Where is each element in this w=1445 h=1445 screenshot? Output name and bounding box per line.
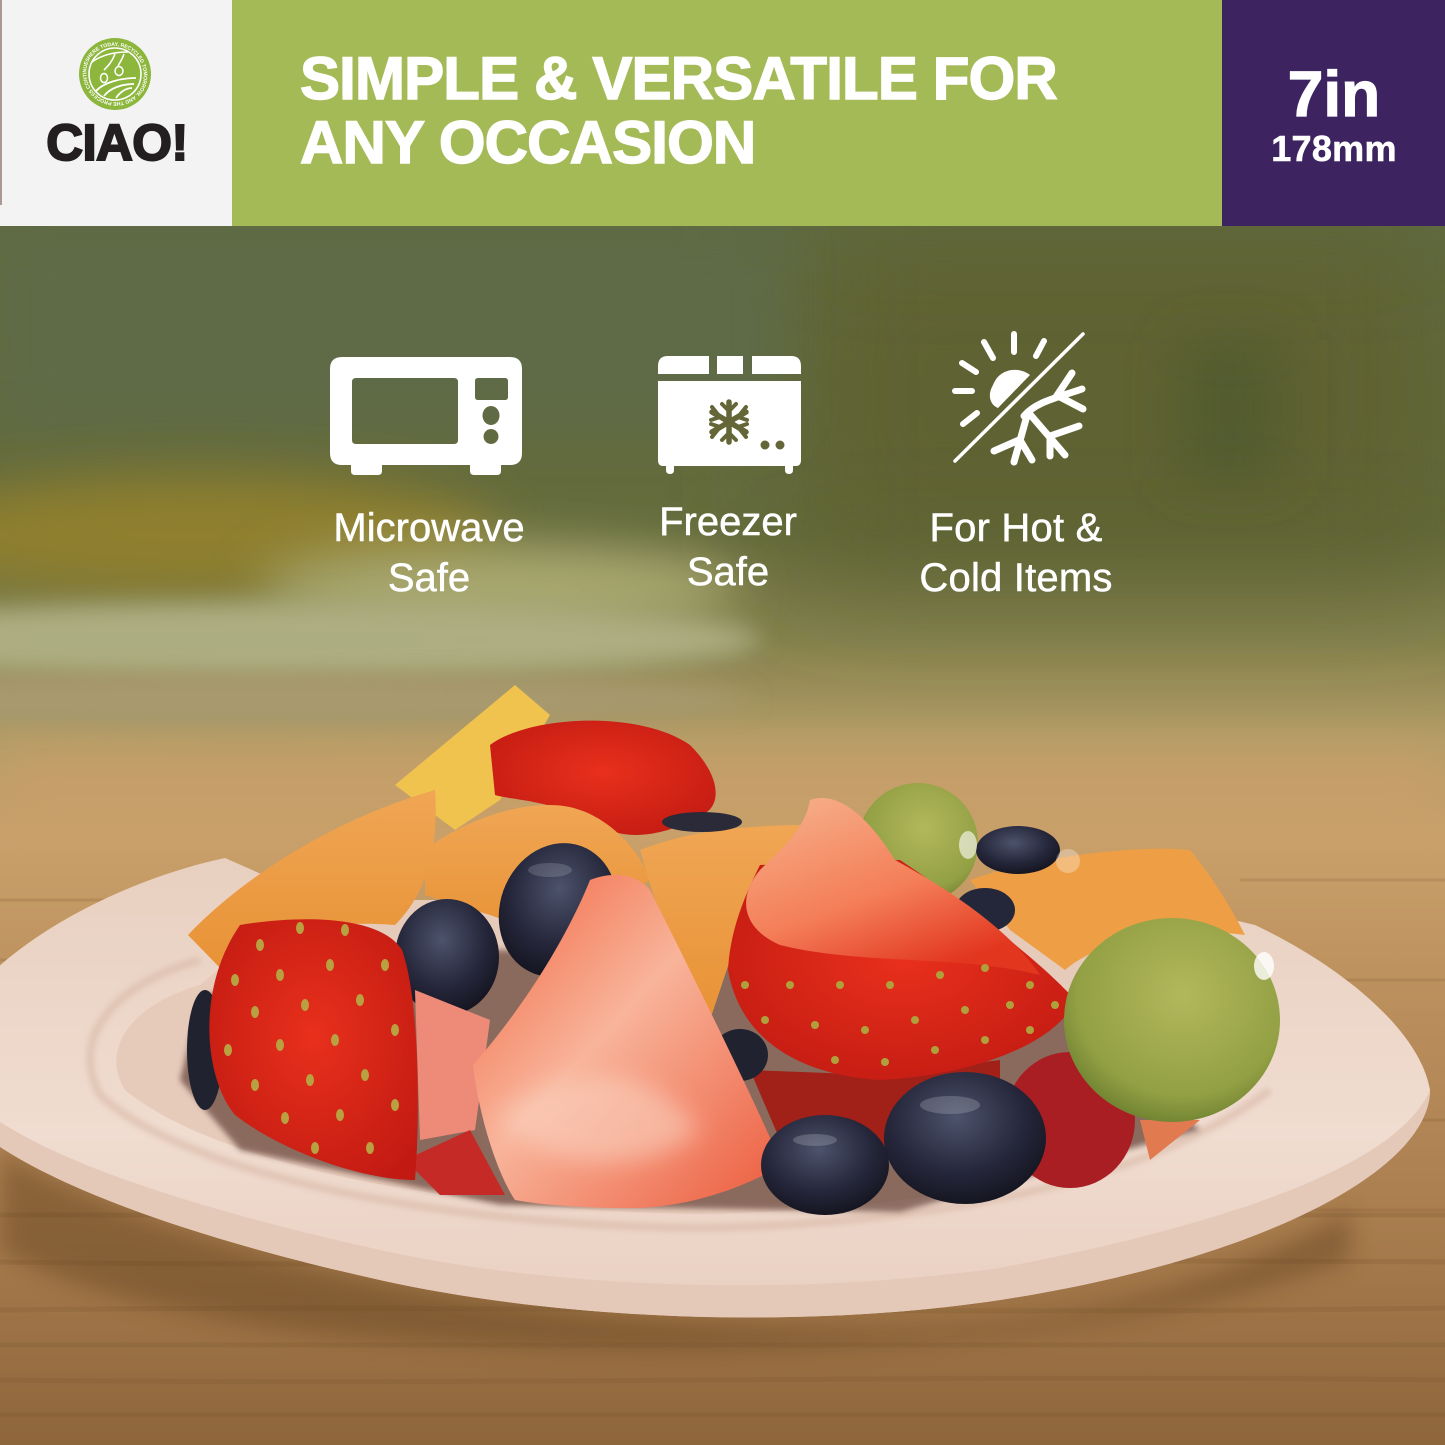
header: size badge: 178mm [1271,128,1397,169]
cut strawberry centre [473,875,782,1208]
header: size badge: 7in [1288,58,1380,130]
strawberry right [728,798,1075,1080]
title: ANY OCCASION [300,109,755,176]
label: microwave safe: Safe [388,556,470,600]
plate [0,858,1430,1317]
title: SIMPLE & VERSATILE FOR [300,45,1057,112]
strawberry pieces [415,990,490,1140]
header: green title band [232,0,1222,226]
icon: freezer [658,356,801,474]
fruit highlights [528,831,1274,1146]
melon and back fruit [188,685,1245,1020]
header: logo panel [0,0,232,226]
blurred background tones [0,226,1445,810]
green grape [1064,918,1280,1122]
label: freezer safe: Freezer [659,500,797,544]
icon: hot and cold [955,334,1083,462]
label: hot and cold: Cold Items [919,556,1113,600]
photo: plate of fruit [0,685,1430,1350]
logo badge [79,38,151,110]
blueberries behind [395,899,499,1015]
label: freezer safe: Safe [687,550,769,594]
plate shadow [0,1150,1350,1350]
icon: microwave [330,357,522,475]
front blueberries [884,1072,1046,1204]
dark shadow in bowl [180,950,1200,1212]
label: microwave safe: Microwave [333,506,525,550]
header: size badge [1222,0,1445,226]
large strawberry left [209,919,418,1180]
label: hot and cold: For Hot & [930,506,1103,550]
logo wordmark: CIAO! [46,114,188,171]
wood grain [0,880,1445,1415]
